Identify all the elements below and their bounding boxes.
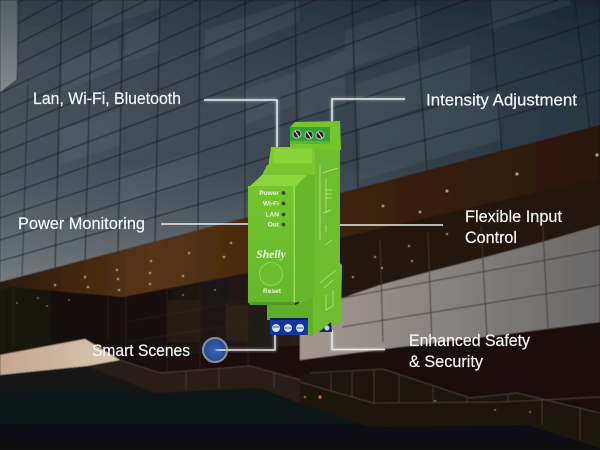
small blue terminal (319, 322, 332, 332)
callout line: Smart Scenes (225, 335, 275, 350)
LED labels: LAN (265, 212, 279, 218)
lit parapet left (0, 339, 120, 375)
glass facade (0, 0, 600, 290)
LED labels: Out (268, 222, 280, 228)
label: Power Monitoring: Power Monitoring (18, 215, 145, 233)
dark glass right (340, 178, 600, 298)
lower neck (267, 297, 313, 336)
top screw terminal (290, 121, 341, 150)
label: Enhanced Safety & Security: Enhanced Safety (409, 332, 531, 350)
reset button (260, 262, 282, 295)
callout line: Flexible Input Control (338, 224, 443, 226)
label: Flexible Input Control (465, 208, 562, 247)
label: Enhanced Safety & Security: & Security (409, 353, 484, 371)
side body (295, 145, 342, 336)
side panel column (295, 175, 315, 303)
upper body step (267, 147, 315, 175)
dark glass left (0, 262, 300, 360)
label: Lan, Wi-Fi, Bluetooth: Lan, Wi-Fi, Bluetooth (33, 90, 181, 108)
soffit lights (54, 154, 598, 291)
bottom blue terminal (270, 318, 308, 335)
callout line: Lan, Wi-Fi, Bluetooth (204, 100, 277, 147)
callout line: Intensity Adjustment (332, 99, 405, 122)
LED labels: Power (259, 190, 279, 197)
callout line: Power Monitoring (161, 222, 250, 226)
label: Enhanced Safety & Security (409, 332, 531, 371)
lit grey wall right (300, 225, 600, 360)
sky (0, 0, 20, 93)
device: green DIN-rail module (248, 121, 342, 336)
stair glass behind railing left (87, 360, 300, 403)
tower edge (0, 0, 20, 93)
label: Flexible Input Control: Control (465, 229, 517, 247)
LED labels (259, 190, 280, 228)
logo: Shelly (256, 249, 287, 261)
shadow under front (248, 302, 295, 305)
LED labels: Wi-Fi (263, 200, 279, 208)
label: Intensity Adjustment: Intensity Adjustment (426, 92, 577, 110)
stair railings (120, 360, 600, 440)
front face (248, 186, 295, 303)
lower dark building (0, 366, 600, 450)
front face top bevel (249, 175, 307, 187)
LED indicators (282, 191, 285, 226)
smart scenes dot (203, 338, 229, 362)
callout line: Enhanced Safety (332, 330, 385, 350)
side print marks (320, 165, 338, 310)
label: Smart Scenes: Smart Scenes (92, 342, 190, 360)
stairs interior (300, 369, 600, 448)
label: Flexible Input Control: Flexible Input (465, 208, 562, 226)
soffit ceiling (0, 125, 600, 297)
reset button: Reset (263, 288, 282, 295)
